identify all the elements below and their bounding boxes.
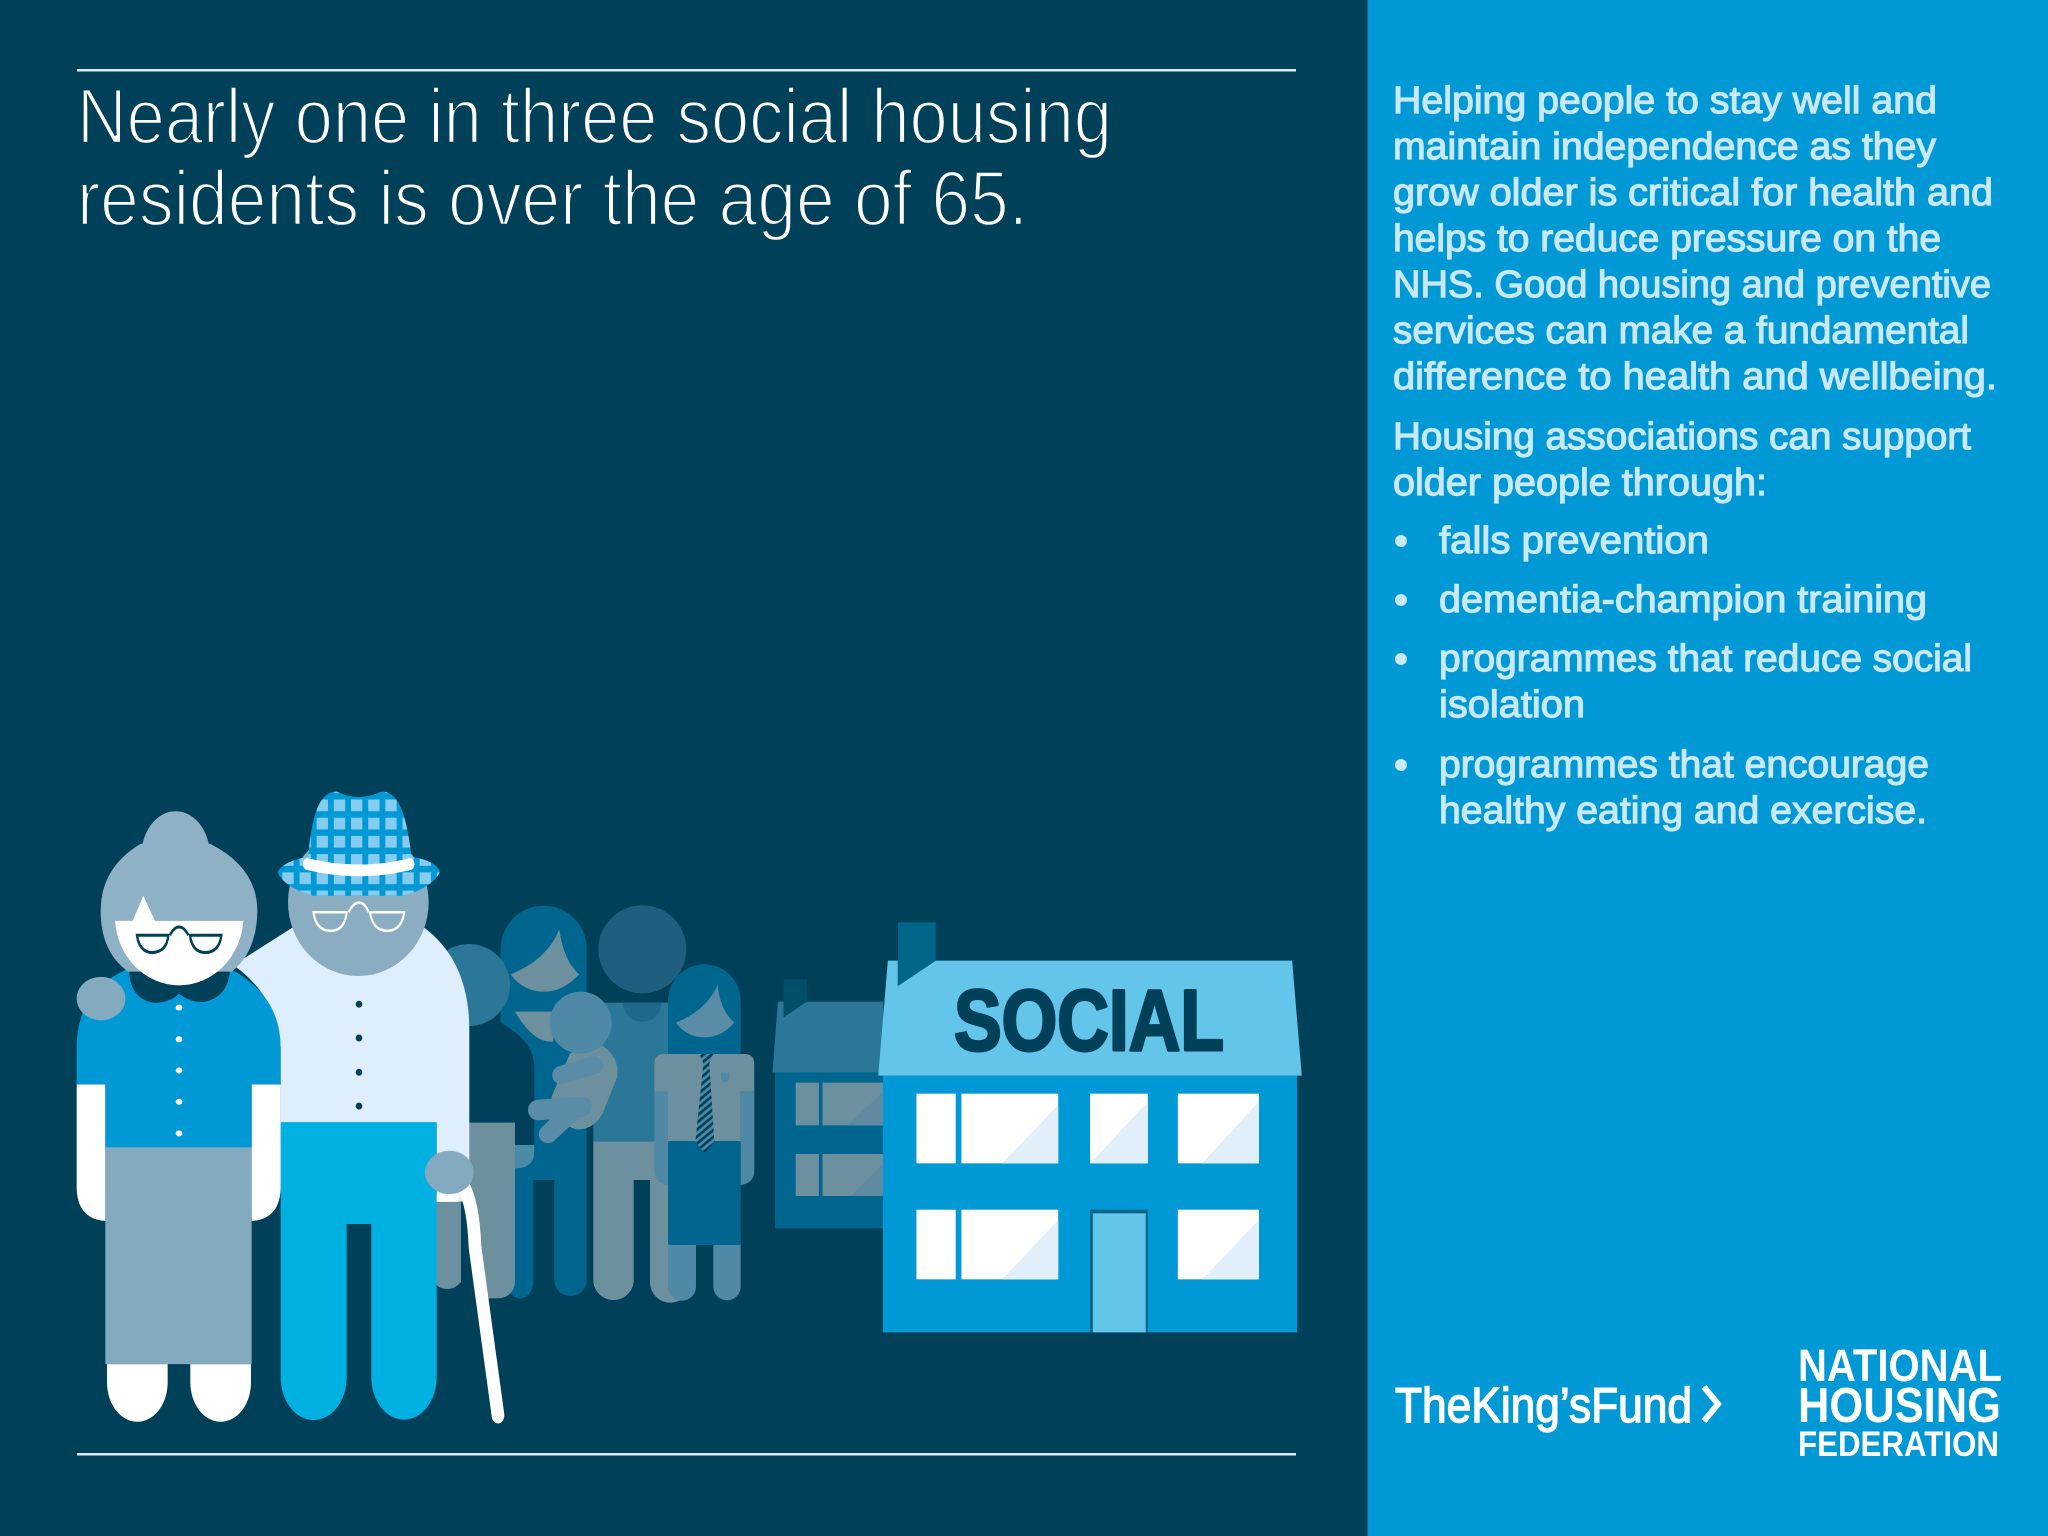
back house windows xyxy=(796,1083,883,1196)
panel: blue right sidebar xyxy=(1368,0,2048,1536)
text block: list lead-in xyxy=(1393,416,1971,504)
text block: introduction: NHS. Good housing and preventive xyxy=(1393,264,1991,306)
figure: baby xyxy=(538,992,618,1134)
title xyxy=(77,72,1112,242)
older man's trousers xyxy=(281,1122,437,1420)
woman's arms xyxy=(77,1084,281,1221)
illustration: background residents xyxy=(428,905,754,1303)
back house roof xyxy=(772,1002,883,1072)
panel: dark left background xyxy=(0,0,1368,1536)
house walls xyxy=(883,1076,1297,1332)
text block: introduction: grow older is critical for health and xyxy=(1393,172,1993,214)
back house chimney xyxy=(784,979,807,1017)
figure: woman holding baby xyxy=(501,906,587,1298)
text block: introduction: difference to health and wellbeing. xyxy=(1393,356,1997,398)
bullet list: programmes that reduce social xyxy=(1439,638,1972,680)
illustration: older woman xyxy=(77,811,281,1422)
walking cane xyxy=(437,1186,498,1415)
bullet list: programmes that encourage xyxy=(1439,744,1929,786)
text block: introduction: helps to reduce pressure on the xyxy=(1393,218,1941,260)
logo: National Housing Federation: HOUSING xyxy=(1798,1379,2001,1433)
house door xyxy=(1090,1210,1148,1332)
woman's legs xyxy=(107,1364,251,1422)
older man's shirt xyxy=(233,927,469,1202)
back house walls xyxy=(775,1072,883,1228)
logo: National Housing Federation: FEDERATION xyxy=(1798,1425,1999,1464)
figure: man partly hidden behind older man xyxy=(428,944,534,1298)
title: residents is over the age of 65. xyxy=(77,154,1028,242)
older man's head xyxy=(288,829,429,976)
illustration: front social house xyxy=(878,922,1302,1332)
woman's blouse buttons xyxy=(176,1005,182,1136)
illustration: older man with hat and cane xyxy=(233,787,498,1420)
figure: man in teal shirt xyxy=(593,905,691,1303)
house sign text: SOCIAL xyxy=(954,973,1224,1069)
text block: introduction: maintain independence as they xyxy=(1393,126,1936,168)
woman's face xyxy=(115,896,243,985)
woman's glasses xyxy=(137,927,221,953)
text block: introduction: Helping people to stay well and xyxy=(1393,80,1937,122)
woman's hair and bun xyxy=(101,811,257,972)
woman's blue blouse xyxy=(77,969,281,1148)
icon: checked hat xyxy=(278,792,440,896)
logo: National Housing Federation: NATIONAL xyxy=(1798,1340,2002,1391)
older man's shirt buttons xyxy=(356,1001,362,1110)
bullet list: isolation xyxy=(1439,684,1585,726)
house roof xyxy=(878,961,1302,1076)
older man's hand on woman's shoulder xyxy=(77,977,125,1020)
bullet list xyxy=(1395,520,1972,832)
text block: introduction xyxy=(1393,80,1997,398)
woman's collar xyxy=(129,969,230,1003)
text block: list lead-in: Housing associations can support xyxy=(1393,416,1971,458)
logo: The King's Fund: TheKing’sFund xyxy=(1395,1379,1692,1433)
older man's hand xyxy=(425,1151,474,1194)
house windows xyxy=(916,1094,1259,1279)
illustration: back house xyxy=(772,979,883,1228)
woman's skirt xyxy=(105,1147,252,1364)
bullet list: dementia-champion training xyxy=(1439,579,1927,621)
figure: woman in uniform xyxy=(654,964,754,1301)
title: Nearly one in three social housing xyxy=(77,72,1112,160)
bullet list: healthy eating and exercise. xyxy=(1439,790,1927,832)
house chimney xyxy=(898,922,936,986)
logo: National Housing Federation xyxy=(1798,1340,2002,1464)
text block: introduction: services can make a fundamental xyxy=(1393,310,1969,352)
text block: list lead-in: older people through: xyxy=(1393,462,1767,504)
older man's glasses xyxy=(313,903,404,931)
bullet list: falls prevention xyxy=(1439,520,1709,562)
